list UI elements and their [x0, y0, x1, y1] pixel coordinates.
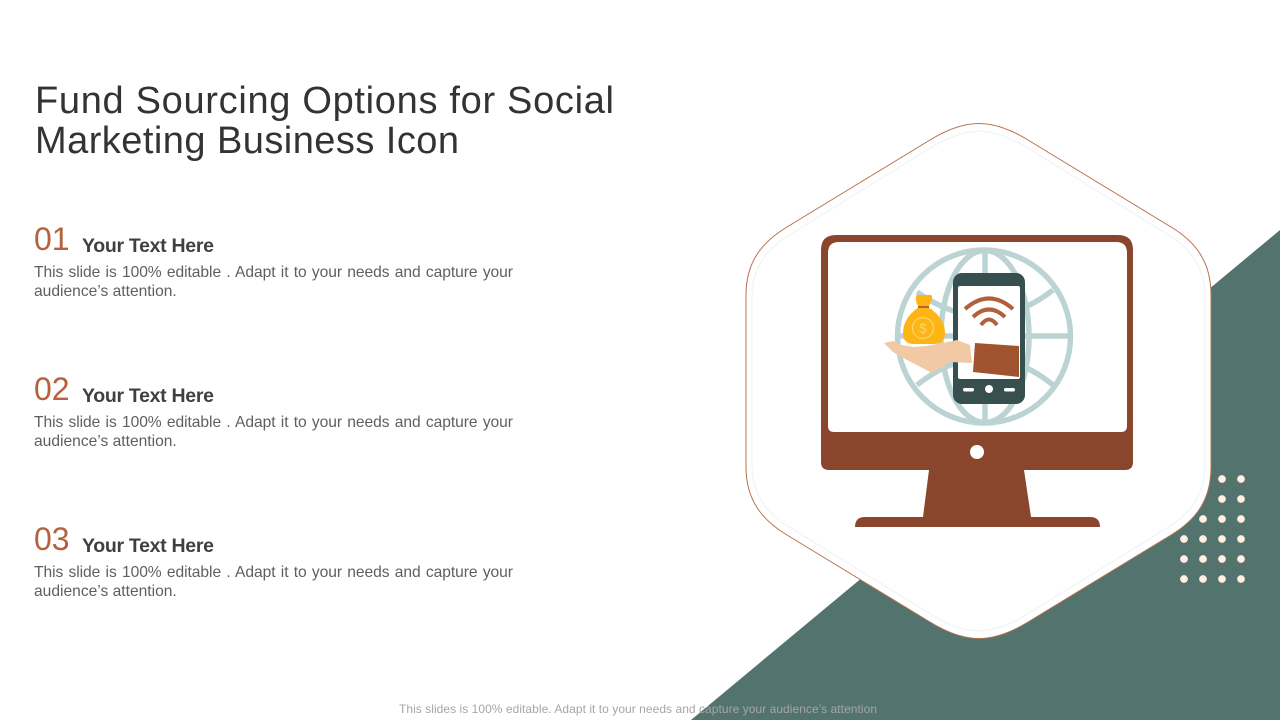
icon: globe: [898, 250, 1070, 423]
icon: money bag: $: [919, 320, 927, 336]
item 01: audience’s attention.: [34, 283, 177, 300]
item 01: 01: [34, 221, 70, 257]
item 03: Your Text Here: [82, 535, 214, 557]
background triangle: [691, 230, 1280, 720]
item 03: 03: [34, 521, 70, 557]
item 01: [34, 221, 513, 300]
icon: smartphone: [953, 273, 1025, 404]
title: Marketing Business Icon: [35, 120, 459, 162]
item 03: [34, 521, 513, 600]
title: [35, 80, 614, 162]
hexagon panel: [746, 124, 1211, 638]
footer note: This slides is 100% editable. Adapt it to your needs and capture your audience’s attention: [399, 702, 877, 716]
item 01: This slide is 100% editable . Adapt it to your needs and capture your: [34, 264, 513, 281]
item 01: Your Text Here: [82, 235, 214, 257]
item 02: audience’s attention.: [34, 433, 177, 450]
title: Fund Sourcing Options for Social: [35, 80, 614, 122]
item 02: This slide is 100% editable . Adapt it to your needs and capture your: [34, 414, 513, 431]
icon: monitor: [821, 235, 1133, 527]
item 02: [34, 371, 513, 450]
icon: hand with sleeve: [884, 340, 1019, 377]
icon: wifi signal: [965, 298, 1013, 325]
dot grid: [1180, 475, 1245, 583]
icon: money bag: [903, 295, 945, 344]
item 03: This slide is 100% editable . Adapt it to your needs and capture your: [34, 564, 513, 581]
item 02: 02: [34, 371, 70, 407]
item 03: audience’s attention.: [34, 583, 177, 600]
item 02: Your Text Here: [82, 385, 214, 407]
